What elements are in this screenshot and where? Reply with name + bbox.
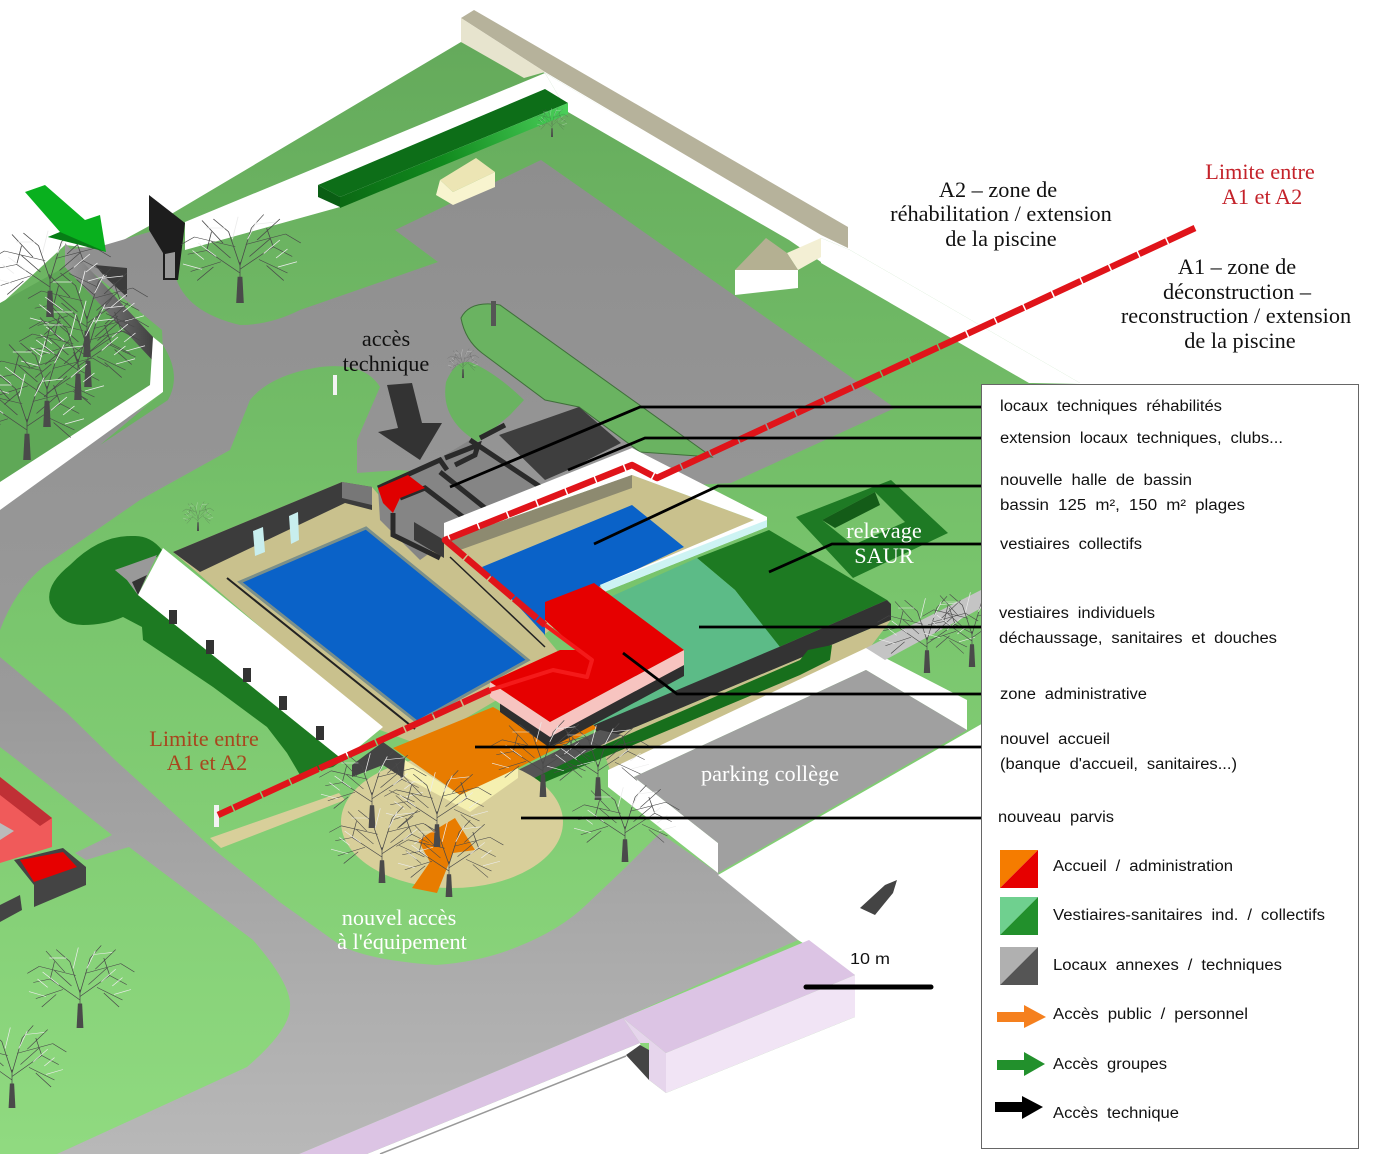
dark entrance wall (352, 742, 405, 778)
label: technical access: technique (343, 351, 429, 376)
north arrow (860, 880, 897, 915)
zone annotation list: zone administrative (1000, 686, 1147, 703)
site lawn base (0, 42, 1080, 1154)
legend arrow: technical access (995, 1096, 1043, 1119)
legend text: technical rooms: Locaux annexes / techniques (1053, 957, 1282, 974)
legend text: group access: Accès groupes (1053, 1056, 1167, 1073)
technical building (378, 407, 621, 560)
legend text: changing rooms: Vestiaires-sanitaires ind. / collectifs (1053, 907, 1325, 924)
orange access arrow (412, 818, 475, 893)
zone annotation list: déchaussage, sanitaires et douches (999, 630, 1277, 647)
zone annotation list: locaux techniques réhabilités (1000, 398, 1222, 415)
beige path (210, 793, 345, 848)
legend text: public access: Accès public / personnel (1053, 1006, 1248, 1023)
label: zone A1: déconstruction – (1163, 279, 1312, 304)
orange reception (393, 707, 597, 795)
scale bar (806, 951, 931, 987)
red administration block (490, 583, 684, 748)
hedge and long white roof (49, 536, 383, 775)
label: parking: parking collège (701, 761, 839, 786)
legend text: technical access: Accès technique (1053, 1105, 1179, 1122)
zone annotation list: nouveau parvis (998, 809, 1114, 826)
label: new access: nouvel accès (342, 905, 456, 930)
black gate (149, 195, 185, 280)
label: zone A1: A1 – zone de (1178, 254, 1296, 279)
post markers (214, 301, 496, 827)
swatch: changing rooms (1000, 897, 1038, 935)
indoor pool (482, 505, 684, 635)
parking wall (608, 648, 967, 873)
perimeter walls (185, 10, 1080, 383)
collective changing rooms (697, 530, 887, 647)
label: lower boundary: A1 et A2 (167, 750, 247, 775)
zone annotation list: nouvel accueil (1000, 731, 1110, 748)
cream entrance wall (405, 760, 518, 812)
label: zone A1: reconstruction / extension (1121, 303, 1351, 328)
swatch: technical rooms (1000, 947, 1038, 985)
legend panel (982, 384, 1358, 1148)
building edge (594, 600, 891, 742)
court deck (173, 482, 565, 745)
technical access arrow (378, 383, 442, 460)
parvis circle (341, 756, 563, 888)
wall behind right trees (866, 588, 985, 660)
zone annotation list (998, 398, 1283, 826)
label: zone A1: de la piscine (1184, 328, 1296, 353)
zone annotation list: extension locaux techniques, clubs... (1000, 430, 1283, 447)
label: upper boundary: Limite entre (1205, 159, 1315, 184)
label: zone A2: de la piscine (945, 226, 1057, 251)
label: technical access: accès (362, 326, 410, 351)
label: relevage SAUR: SAUR (854, 543, 914, 568)
deck separation line (450, 557, 545, 647)
legend arrow: group access (997, 1052, 1045, 1076)
service wall (518, 730, 622, 785)
zone annotation list: vestiaires individuels (999, 605, 1155, 622)
outdoor pool (227, 528, 528, 729)
cream box (436, 158, 495, 205)
beige arrow (735, 238, 821, 295)
lower roads (0, 657, 798, 1154)
label: zone A2: A2 – zone de (939, 177, 1057, 202)
hall white frame (444, 448, 767, 592)
swatch: reception and administration (1000, 850, 1038, 888)
court wall (173, 482, 372, 572)
parking floor (634, 670, 967, 873)
individual changing rooms (550, 558, 780, 737)
scale bar: 10 m (850, 951, 890, 968)
pink strip (299, 940, 855, 1154)
upper road and large paved area (0, 160, 895, 630)
legend arrow: public access (997, 1005, 1046, 1028)
label: upper boundary: A1 et A2 (1222, 184, 1302, 209)
label: zone A2: réhabilitation / extension (890, 201, 1112, 226)
green group access arrow (507, 645, 832, 798)
tree enclosure (0, 243, 174, 510)
lawn islands (445, 304, 712, 457)
leader lines (450, 407, 983, 818)
indoor hall deck (448, 475, 754, 645)
trees (0, 108, 1023, 1108)
legend text: reception and administration: Accueil / administration (1053, 858, 1233, 875)
zone annotation list: (banque d'accueil, sanitaires...) (1000, 756, 1237, 773)
green access arrow (25, 185, 106, 252)
left red building (0, 777, 86, 922)
white ground lower right (367, 722, 985, 1154)
zone annotation list: vestiaires collectifs (1000, 536, 1142, 553)
label: lower boundary: Limite entre (149, 726, 259, 751)
zone annotation list: nouvelle halle de bassin (1000, 472, 1192, 489)
zone annotation list: bassin 125 m², 150 m² plages (1000, 497, 1245, 514)
label: relevage SAUR: relevage (846, 518, 922, 543)
relevage SAUR block (796, 480, 948, 578)
green hedge bar (318, 89, 568, 208)
label: new access: à l'équipement (337, 929, 468, 954)
boundary line A1 A2 (218, 228, 1195, 815)
walkway (600, 620, 891, 770)
